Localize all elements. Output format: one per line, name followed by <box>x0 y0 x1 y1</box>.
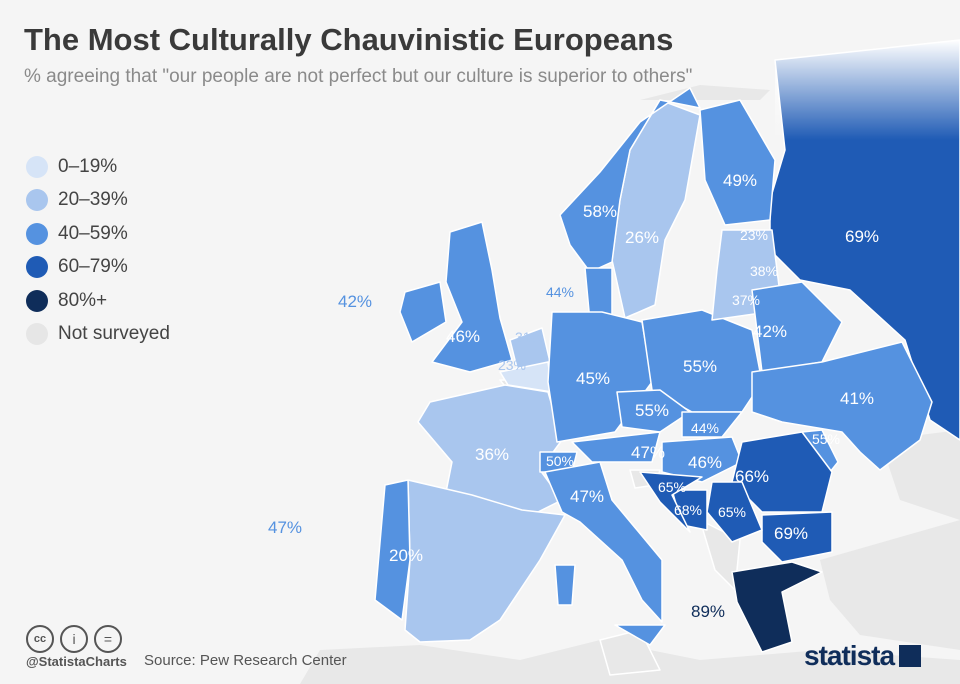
baltics <box>712 230 782 320</box>
value labels: 44% <box>691 420 719 436</box>
legend <box>26 156 170 345</box>
value labels: 36% <box>475 445 509 464</box>
value labels: 41% <box>840 389 874 408</box>
value labels: 55% <box>812 431 840 447</box>
footer: license icons: i <box>72 631 76 647</box>
serbia <box>707 482 762 542</box>
value labels: 89% <box>691 602 725 621</box>
value labels: 69% <box>845 227 879 246</box>
ukraine <box>752 342 932 470</box>
croatia <box>640 472 702 532</box>
subtitle: % agreeing that "our people are not perfect but our culture is superior to others" <box>24 66 692 87</box>
title: The Most Culturally Chauvinistic Europeans <box>24 22 673 57</box>
value labels: 37% <box>732 292 760 308</box>
value labels: 26% <box>625 228 659 247</box>
value labels: 45% <box>576 369 610 388</box>
value labels: 31% <box>515 329 543 345</box>
spain <box>405 480 565 642</box>
portugal <box>375 480 410 620</box>
value labels: 58% <box>583 202 617 221</box>
greece <box>732 562 822 652</box>
poland <box>642 310 762 412</box>
belarus <box>752 282 842 372</box>
denmark <box>585 268 612 322</box>
russia <box>770 40 960 440</box>
value labels: 44% <box>546 284 574 300</box>
germany <box>548 312 652 442</box>
value labels: 47% <box>268 518 302 537</box>
value labels: 69% <box>774 524 808 543</box>
value labels: 68% <box>674 502 702 518</box>
norway <box>560 88 700 272</box>
bosnia <box>672 490 707 530</box>
value labels: 55% <box>635 401 669 420</box>
source: Source: Pew Research Center <box>144 652 347 669</box>
footer: license icons <box>26 625 122 653</box>
footer: license icons: = <box>104 631 112 647</box>
value labels: 55% <box>683 357 717 376</box>
bulgaria <box>762 512 832 562</box>
austria <box>572 432 660 462</box>
legend: 40–59% <box>58 223 128 244</box>
italy <box>545 462 662 622</box>
value labels: 23% <box>498 357 526 373</box>
finland <box>700 100 775 225</box>
hungary <box>662 437 742 482</box>
romania <box>732 432 832 512</box>
footer text: @StatistaCharts <box>26 654 127 669</box>
value labels: 20% <box>389 546 423 565</box>
value labels: 38% <box>750 263 778 279</box>
value labels: 47% <box>570 487 604 506</box>
value labels: 49% <box>723 171 757 190</box>
value labels: 65% <box>658 479 686 495</box>
footer: license icons: cc <box>34 633 46 645</box>
legend: 80%+ <box>58 290 107 311</box>
value labels: 66% <box>735 467 769 486</box>
value labels: 42% <box>753 322 787 341</box>
value labels: 46% <box>446 327 480 346</box>
legend: Not surveyed <box>58 323 170 344</box>
value labels: 65% <box>718 504 746 520</box>
value labels: 50% <box>546 453 574 469</box>
uk <box>432 222 512 372</box>
benelux <box>510 328 550 372</box>
not surveyed land <box>500 380 740 675</box>
legend: 60–79% <box>58 256 128 277</box>
value labels <box>268 171 879 621</box>
value labels: 42% <box>338 292 372 311</box>
switzerland <box>540 452 577 472</box>
ireland <box>400 282 446 342</box>
statista logo: statista <box>804 640 894 671</box>
sweden <box>612 100 700 318</box>
legend: 0–19% <box>58 156 117 177</box>
value labels: 23% <box>740 227 768 243</box>
czechia <box>617 390 690 432</box>
background land <box>300 85 960 684</box>
moldova <box>802 430 838 472</box>
value labels: 47% <box>631 443 665 462</box>
france <box>418 385 562 530</box>
legend: 20–39% <box>58 189 128 210</box>
value labels: 46% <box>688 453 722 472</box>
slovakia <box>682 412 742 437</box>
